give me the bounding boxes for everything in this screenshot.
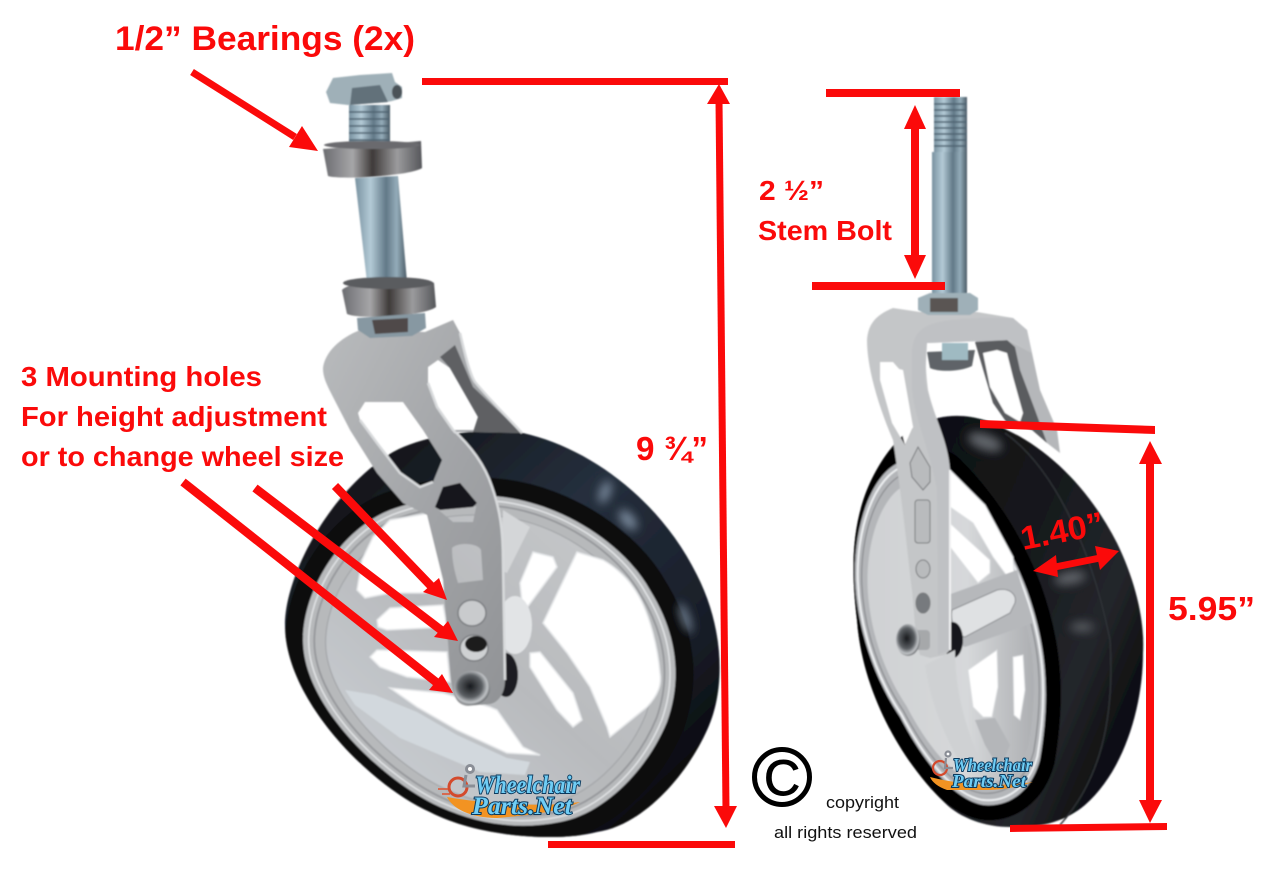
width value: 1.40” xyxy=(1017,505,1107,557)
copyright text: copyright xyxy=(826,793,899,812)
right logo swoosh xyxy=(930,777,1033,790)
left caster wheel photo xyxy=(285,73,720,837)
hole two xyxy=(460,635,488,661)
vertical double arrow xyxy=(1139,441,1162,823)
total height dimension xyxy=(422,78,737,848)
height value: 9 ¾” xyxy=(636,430,708,467)
wheel height value: 5.95” xyxy=(1168,590,1255,627)
left rim xyxy=(303,495,676,826)
arrow: bottom mounting hole xyxy=(183,482,453,693)
left fork rear flange xyxy=(440,345,522,434)
vertical double arrow xyxy=(904,105,926,279)
right rim xyxy=(855,459,1046,805)
top line xyxy=(422,78,728,85)
top line xyxy=(980,420,1155,434)
copyright symbol xyxy=(754,750,810,806)
stem bolt dimension xyxy=(758,89,960,290)
left fork upper blade hole fill xyxy=(435,483,477,510)
wheel height dimension xyxy=(980,420,1255,832)
label line 1: 3 Mounting holes xyxy=(21,361,262,392)
label line 3: or to change wheel size xyxy=(21,441,344,472)
bolt xyxy=(454,671,490,705)
right fork rear flange xyxy=(975,320,1060,453)
label line 2: For height adjustment xyxy=(21,401,327,432)
vertical double arrow xyxy=(707,84,737,828)
left rim plate behind fork xyxy=(500,510,530,573)
right caster wheel photo xyxy=(854,97,1143,827)
left bushing xyxy=(494,653,518,697)
width arrow xyxy=(1033,546,1119,577)
arrow: middle mounting hole xyxy=(255,488,458,641)
hole one xyxy=(458,600,486,626)
logo wordmark: Wheelchair xyxy=(475,772,580,799)
left logo xyxy=(438,766,580,820)
right logo wheelchair icon xyxy=(933,752,953,775)
top line xyxy=(826,89,960,97)
right logo wordmark: Wheelchair xyxy=(953,755,1033,775)
left fork xyxy=(323,320,522,706)
left hub xyxy=(498,596,532,654)
left rim lower wedge xyxy=(345,690,530,775)
right logo wordmark 2: Parts.Net xyxy=(951,771,1027,791)
right tire xyxy=(854,416,1143,827)
right blade holes xyxy=(910,447,930,613)
bottom line xyxy=(548,841,735,848)
right bushing xyxy=(943,622,963,658)
arrow: top mounting hole xyxy=(335,486,447,600)
logo wordmark 2: Parts.Net xyxy=(471,793,573,820)
right bolt xyxy=(896,624,930,656)
right wheel openings xyxy=(950,470,1025,720)
left fork edges xyxy=(360,333,522,680)
left bearings xyxy=(323,141,436,338)
stem value: 2 ½” xyxy=(759,175,824,206)
bottom line xyxy=(812,282,945,290)
tire width dimension xyxy=(1017,505,1119,577)
logo wheelchair icon xyxy=(438,766,475,796)
left wheel openings xyxy=(357,513,660,755)
right axle xyxy=(952,589,1015,637)
right rim lower wedge xyxy=(975,718,1010,770)
mounting holes label xyxy=(21,361,344,472)
right spoke band xyxy=(948,570,1033,647)
copyright symbol: C xyxy=(764,750,800,806)
right stem bolt xyxy=(918,97,978,371)
bearings label: 1/2” Bearings (2x) xyxy=(115,20,415,58)
right fork xyxy=(867,308,1032,658)
logo swoosh xyxy=(447,797,580,818)
right lower spoke xyxy=(925,650,985,770)
stem label: Stem Bolt xyxy=(758,215,892,246)
left stem bolt xyxy=(326,73,407,282)
bottom line xyxy=(1010,823,1167,832)
left tire xyxy=(285,431,720,837)
arrow: bearings xyxy=(192,72,318,151)
right logo xyxy=(930,752,1033,791)
rights text: all rights reserved xyxy=(774,823,917,842)
